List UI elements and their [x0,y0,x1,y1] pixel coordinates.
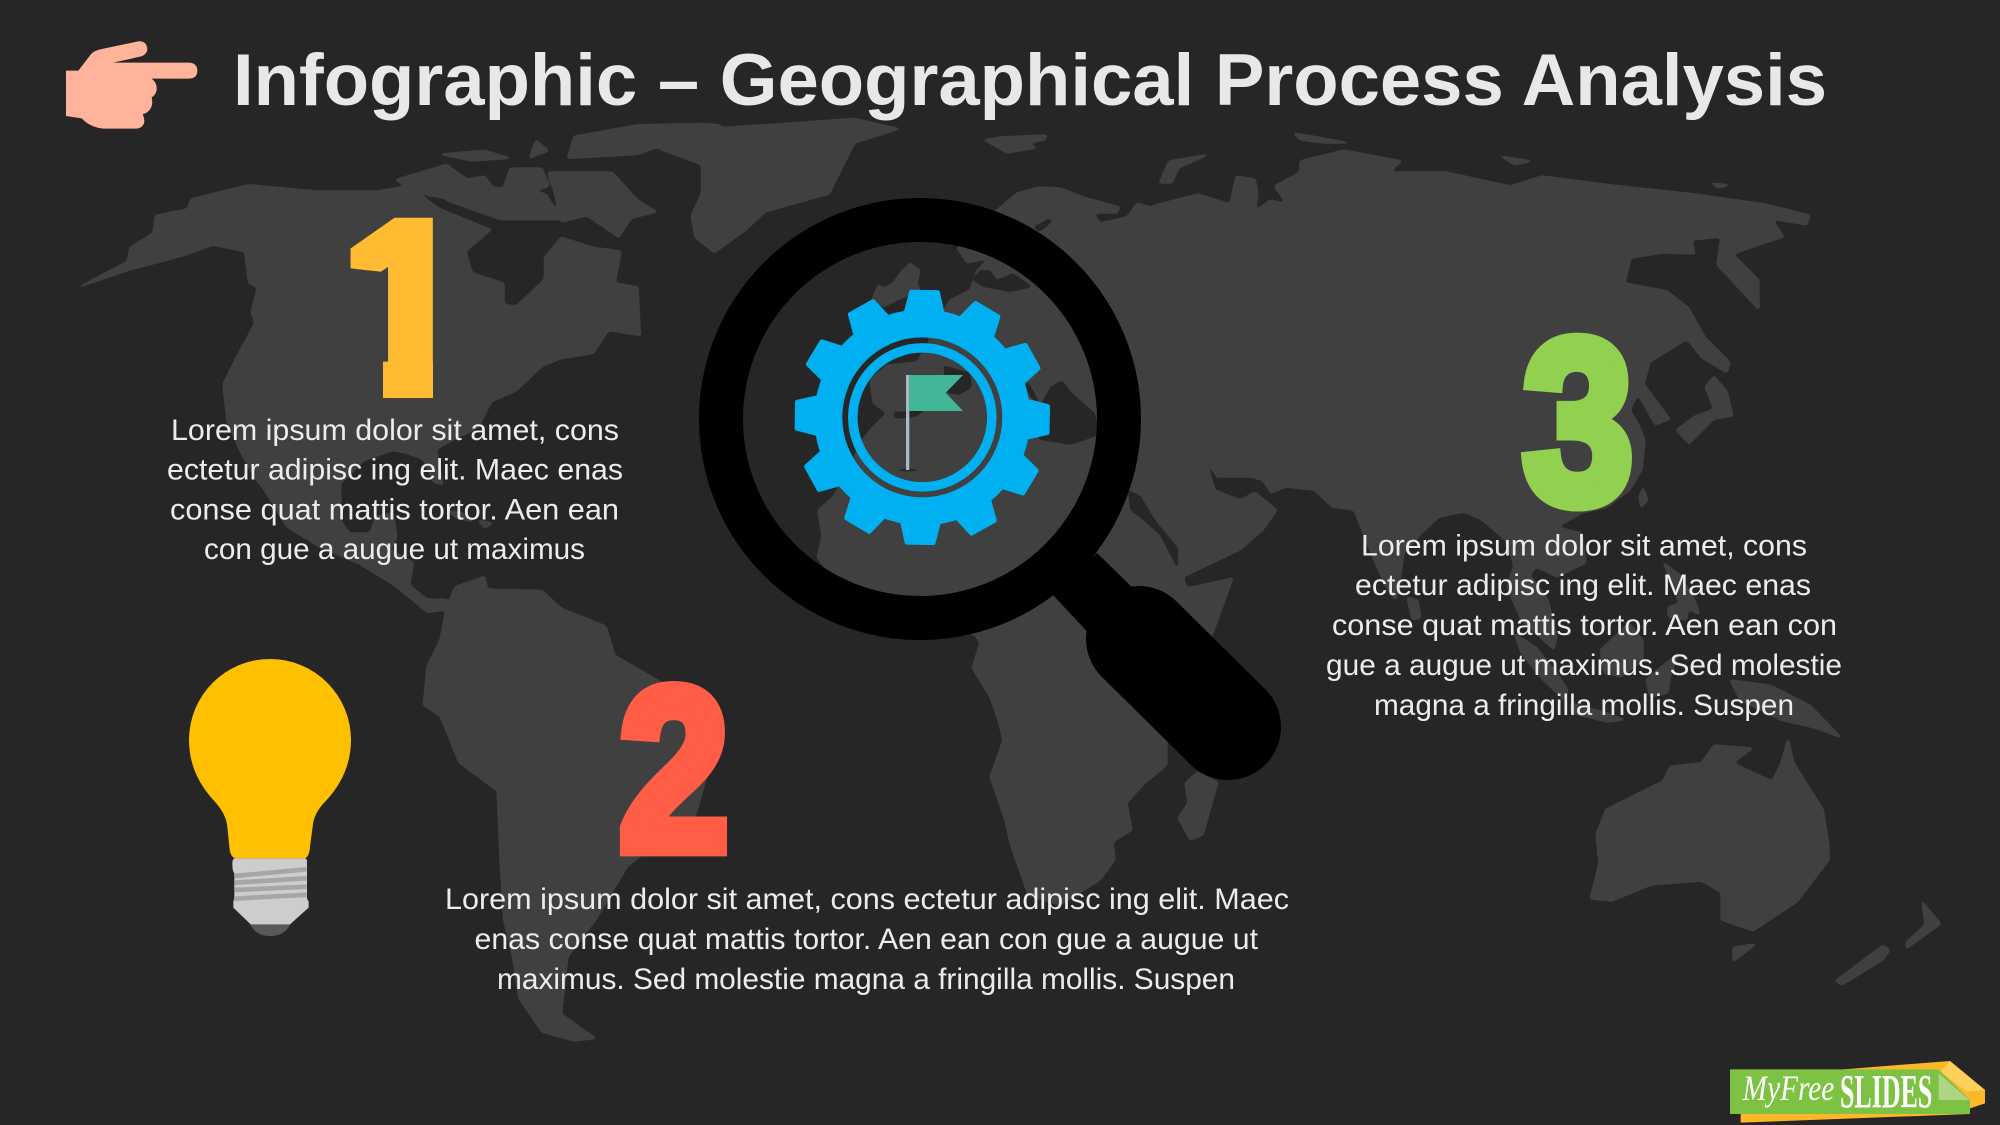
icon: blue gear [797,292,1048,543]
text block 3: Lorem ipsum dolor sit amet, cons [1361,530,1807,562]
text block 1: con gue a augue ut maximus [204,533,585,566]
icon: light bulb [189,659,351,936]
map: inland seas [893,218,1178,570]
map: north america [79,119,899,1041]
text block 2 [445,883,1289,996]
text block 2: Lorem ipsum dolor sit amet, cons ectetur adipisc ing elit. Maec [445,883,1289,916]
logo: MyFreeSlides: MyFree [1742,1068,1834,1108]
magnifier neck [1053,553,1140,640]
text block 1 [167,414,623,566]
text block 2: maximus. Sed molestie magna a fringilla mollis. Suspen [497,963,1235,996]
number 1: 1 [342,173,468,447]
text block 1: conse quat mattis tortor. Aen ean [170,494,619,526]
icon: green flag [898,375,963,472]
magnifier handle [1139,639,1228,727]
world map background [79,119,1941,1041]
map: islands and oceania [872,133,1941,985]
magnifying glass [721,220,1228,727]
magnifier ring [721,220,1119,618]
number 3: 3 [1523,291,1633,551]
text block 3: ectetur adipisc ing elit. Maec enas [1355,569,1811,602]
icon: pointing hand [66,41,197,129]
text block 3: conse quat mattis tortor. Aen ean con [1332,609,1837,642]
text block 1: ectetur adipisc ing elit. Maec enas [167,454,623,486]
title: Infographic – Geographical Process Analysis [233,40,1827,121]
logo: MyFreeSlides [1730,1061,1985,1123]
map: afro-eurasia [817,150,1810,905]
text block 3: magna a fringilla mollis. Suspen [1374,689,1794,722]
number 2: 2 [619,640,729,899]
text block 1: Lorem ipsum dolor sit amet, cons [171,414,619,447]
text block 3 [1326,530,1842,722]
text block 2: enas conse quat mattis tortor. Aen ean con gue a augue ut [474,923,1258,956]
text block 3: gue a augue ut maximus. Sed molestie [1326,649,1842,682]
